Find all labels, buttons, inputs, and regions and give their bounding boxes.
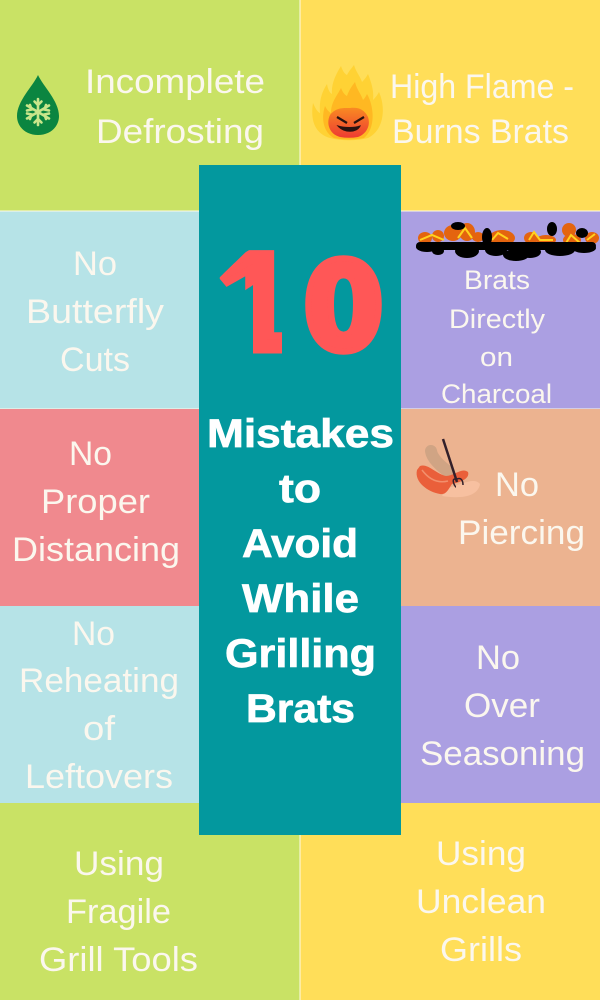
panel: no piercing bbox=[401, 409, 600, 606]
panel: no butterfly cuts: Butterfly bbox=[26, 293, 164, 331]
panel: using unclean grills: Unclean bbox=[416, 883, 546, 921]
title text: Avoid bbox=[242, 522, 358, 566]
panel: high flame bbox=[300, 0, 600, 210]
panel: using fragile grill tools: Fragile bbox=[66, 893, 171, 931]
panel: using unclean grills bbox=[300, 803, 600, 1000]
icon: burning charcoal bbox=[416, 222, 599, 261]
title text: Brats bbox=[246, 687, 355, 731]
panel: no proper distancing bbox=[0, 409, 200, 606]
big number 10: 0 bbox=[303, 206, 384, 386]
panel: no proper distancing: Proper bbox=[41, 483, 150, 521]
panel: brats directly on charcoal: on bbox=[480, 342, 513, 372]
big number 10: 1 bbox=[213, 223, 299, 380]
heading text: Incomplete Defrosting: Incomplete bbox=[85, 63, 265, 101]
panel: no over seasoning: Seasoning bbox=[420, 735, 585, 773]
panel: brats directly on charcoal: Brats bbox=[464, 265, 530, 295]
panel: no butterfly cuts bbox=[0, 212, 200, 408]
big number 10 bbox=[220, 250, 382, 355]
panel: no piercing: Piercing bbox=[458, 514, 585, 552]
panel: brats directly on charcoal: Charcoal bbox=[441, 379, 552, 409]
title text: to bbox=[279, 467, 321, 511]
icon: sausage pierced by fork bbox=[417, 439, 480, 497]
title text: Mistakes bbox=[207, 412, 394, 456]
panel: no proper distancing: No bbox=[69, 435, 112, 473]
heading text: Incomplete Defrosting: Defrosting bbox=[96, 113, 264, 151]
panel: no reheating of leftovers: Reheating bbox=[19, 662, 179, 700]
panel: using fragile grill tools bbox=[0, 803, 300, 1000]
title text: Grilling bbox=[225, 632, 376, 676]
panel: no proper distancing: Distancing bbox=[12, 531, 180, 569]
panel: no over seasoning: No bbox=[476, 639, 520, 677]
title text: While bbox=[242, 577, 359, 621]
panel: brats directly on charcoal bbox=[401, 212, 600, 409]
panel: no piercing: No bbox=[495, 466, 539, 504]
panel: no butterfly cuts: Cuts bbox=[60, 341, 130, 379]
panel: no over seasoning bbox=[401, 606, 600, 803]
panel: no reheating of leftovers bbox=[0, 606, 200, 803]
heading text: High Flame - Burns Brats: Burns Brats bbox=[392, 113, 569, 151]
panel: using fragile grill tools: Grill Tools bbox=[39, 941, 198, 979]
panel: no reheating of leftovers: of bbox=[83, 710, 116, 748]
panel: incomplete defrosting bbox=[0, 0, 300, 210]
panel: using unclean grills: Using bbox=[436, 835, 526, 873]
heading text: High Flame - Burns Brats: High Flame - bbox=[390, 68, 574, 106]
panel: no butterfly cuts: No bbox=[73, 245, 117, 283]
panel: no reheating of leftovers: No bbox=[72, 615, 115, 653]
panel: brats directly on charcoal: Directly bbox=[449, 304, 546, 334]
icon: angry flame bbox=[312, 65, 383, 140]
panel: central title bbox=[199, 165, 401, 835]
panel: using unclean grills: Grills bbox=[440, 931, 522, 969]
panel: no over seasoning: Over bbox=[464, 687, 540, 725]
icon: frozen water drop bbox=[17, 75, 59, 135]
heading text: High Flame - Burns Brats bbox=[390, 68, 574, 151]
title text bbox=[207, 412, 394, 731]
heading text: Incomplete Defrosting bbox=[85, 63, 265, 151]
panel: using fragile grill tools: Using bbox=[74, 845, 164, 883]
panel: no reheating of leftovers: Leftovers bbox=[25, 758, 173, 796]
